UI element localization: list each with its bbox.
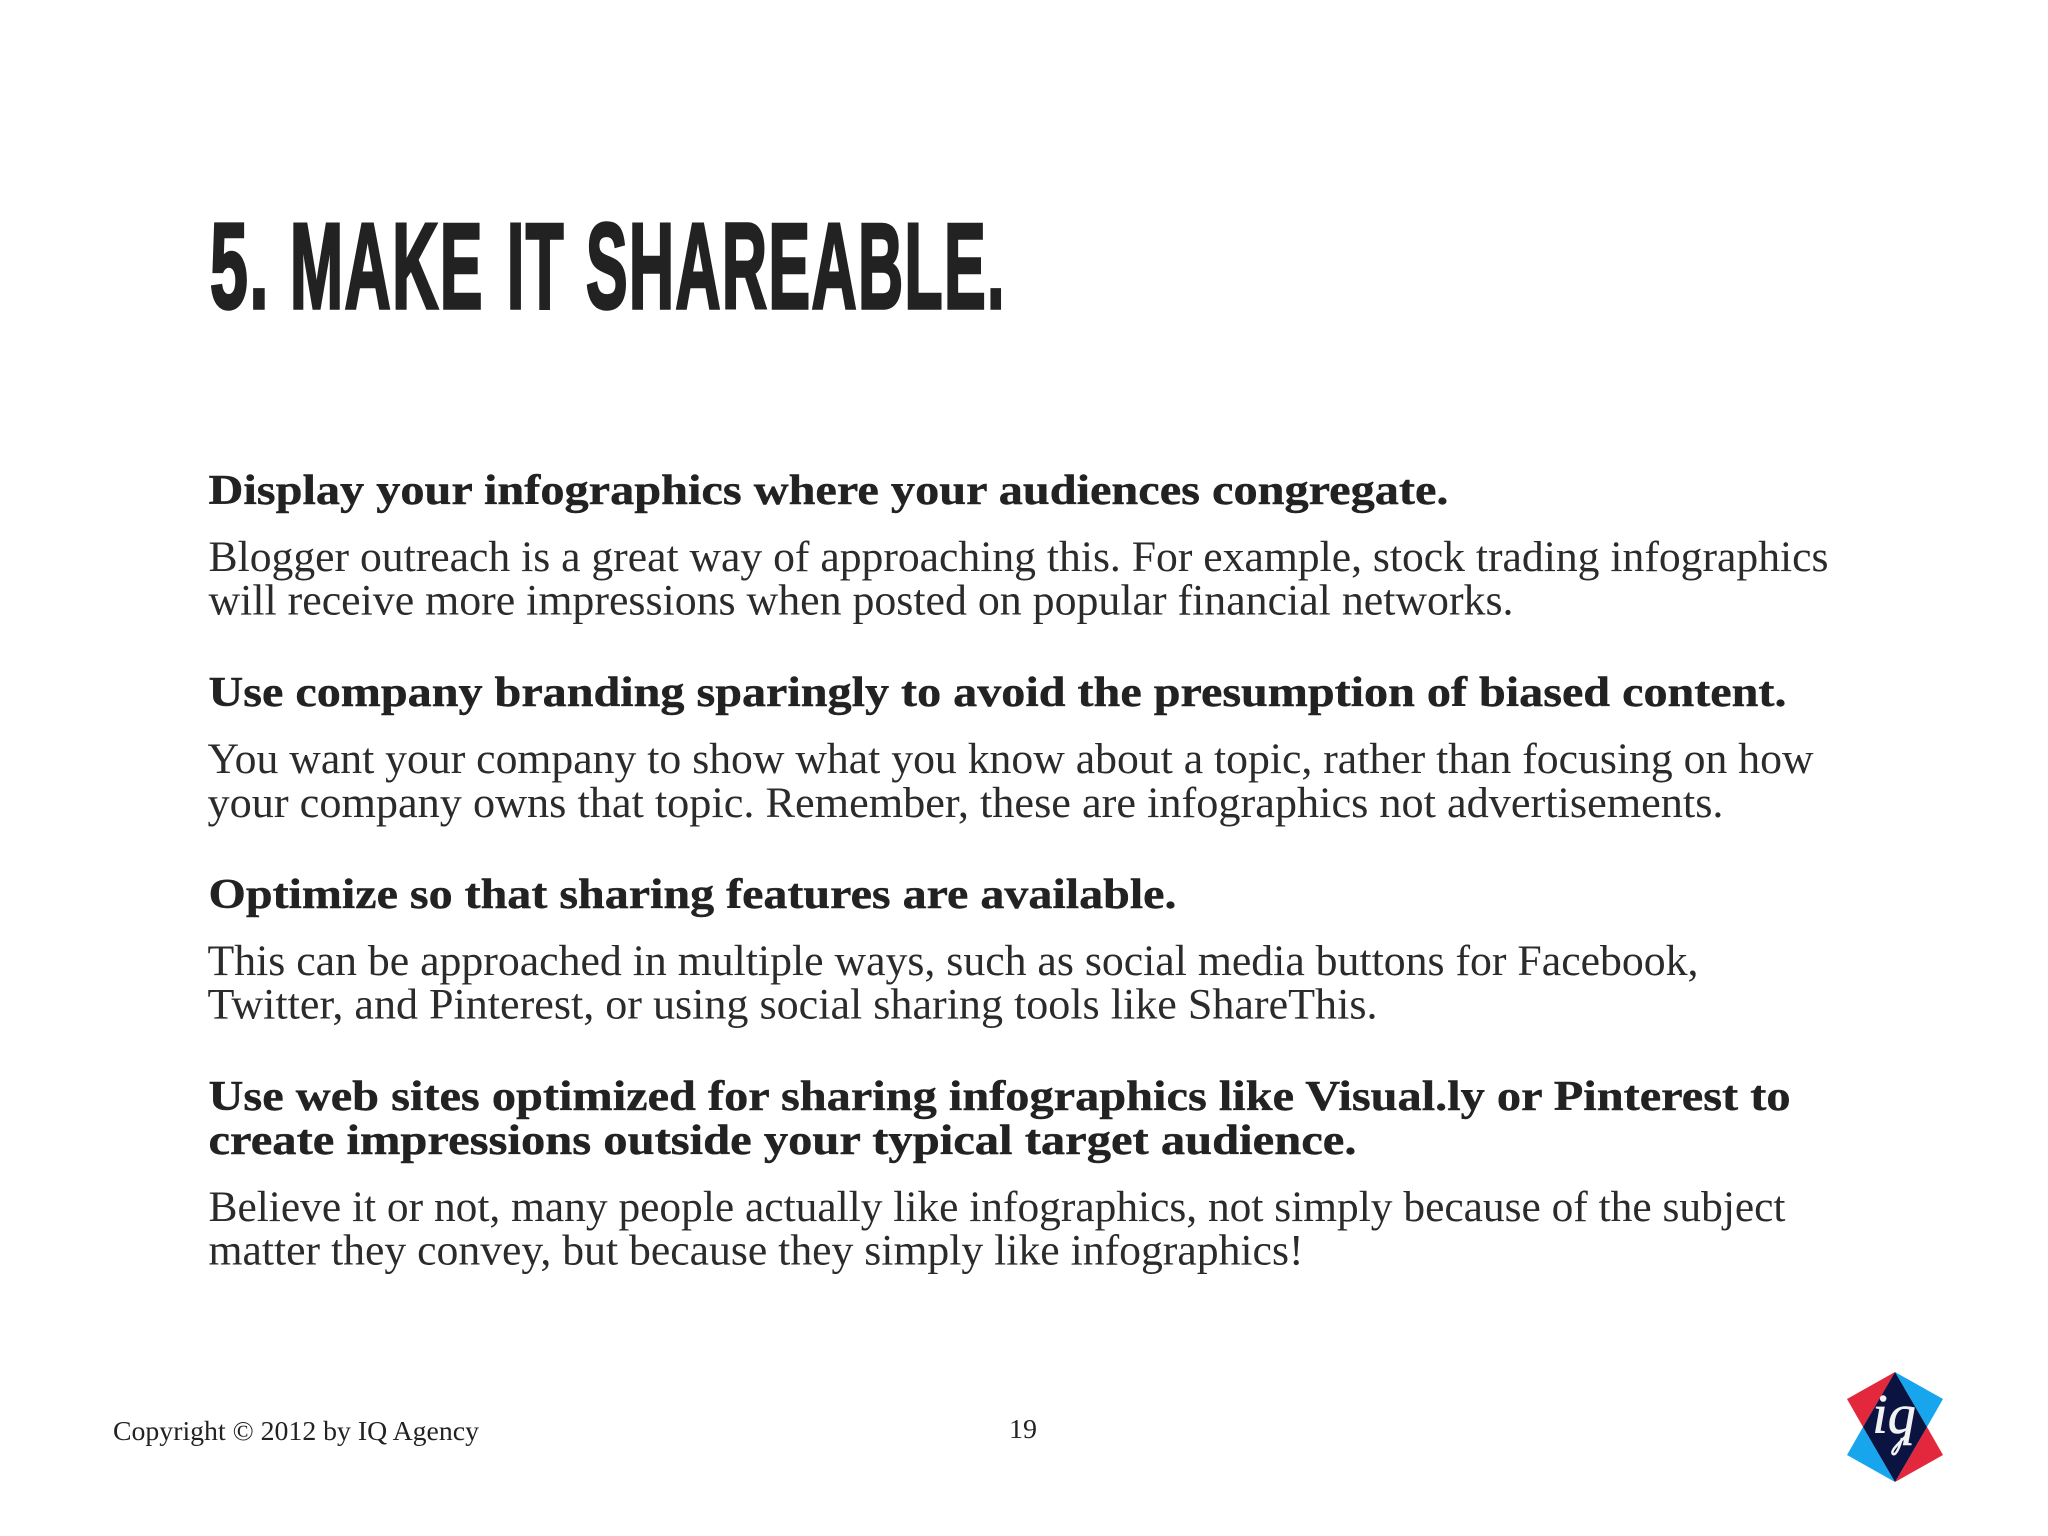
title: 5. [210, 198, 270, 334]
section 3 body [208, 938, 1698, 1028]
page number: 19 [1009, 1414, 1037, 1444]
section 4 body: Believe it or not, many people actually like infographics, not simply because of the subject [208, 1184, 1786, 1231]
title: SHAREABLE. [586, 198, 1006, 334]
title: MAKE [290, 198, 484, 334]
section 3 body: This can be approached in multiple ways, such as social media buttons for Facebook, [208, 938, 1698, 985]
section 2: company branding [208, 670, 1814, 827]
section 1 body [208, 534, 1828, 624]
section 4 body [208, 1184, 1786, 1274]
section 4 heading [208, 1074, 1790, 1164]
section 2 heading: Use company branding sparingly to avoid the presumption of biased content. [208, 670, 1786, 716]
copyright footer: Copyright © 2012 by IQ Agency [113, 1416, 480, 1446]
section 1 heading: Display your infographics where your audiences congregate. [208, 468, 1448, 514]
section 4 body: matter they convey, but because they simply like infographics! [208, 1228, 1304, 1274]
section 1: display your infographics [208, 468, 1828, 624]
section 2 body: your company owns that topic. Remember, these are infographics not advertisements. [208, 780, 1724, 827]
section 3: sharing features [208, 872, 1698, 1028]
section 4: web sites for sharing [208, 1074, 1790, 1274]
section 3 body: Twitter, and Pinterest, or using social sharing tools like ShareThis. [208, 982, 1378, 1028]
icon: iq agency logo: iq [1872, 1384, 1916, 1446]
title: IT [507, 198, 565, 334]
section 4 heading: Use web sites optimized for sharing infographics like Visual.ly or Pinterest to [208, 1074, 1790, 1120]
section 1 body: will receive more impressions when posted on popular financial networks. [208, 578, 1514, 624]
title [210, 198, 1006, 334]
section 1 body: Blogger outreach is a great way of approaching this. For example, stock trading infographics [208, 534, 1828, 581]
icon: iq agency logo [1847, 1372, 1943, 1482]
section 3 heading: Optimize so that sharing features are available. [208, 872, 1176, 918]
section 2 body: You want your company to show what you know about a topic, rather than focusing on how [208, 736, 1814, 783]
section 2 body [208, 736, 1814, 827]
section 4 heading: create impressions outside your typical target audience. [208, 1118, 1356, 1164]
